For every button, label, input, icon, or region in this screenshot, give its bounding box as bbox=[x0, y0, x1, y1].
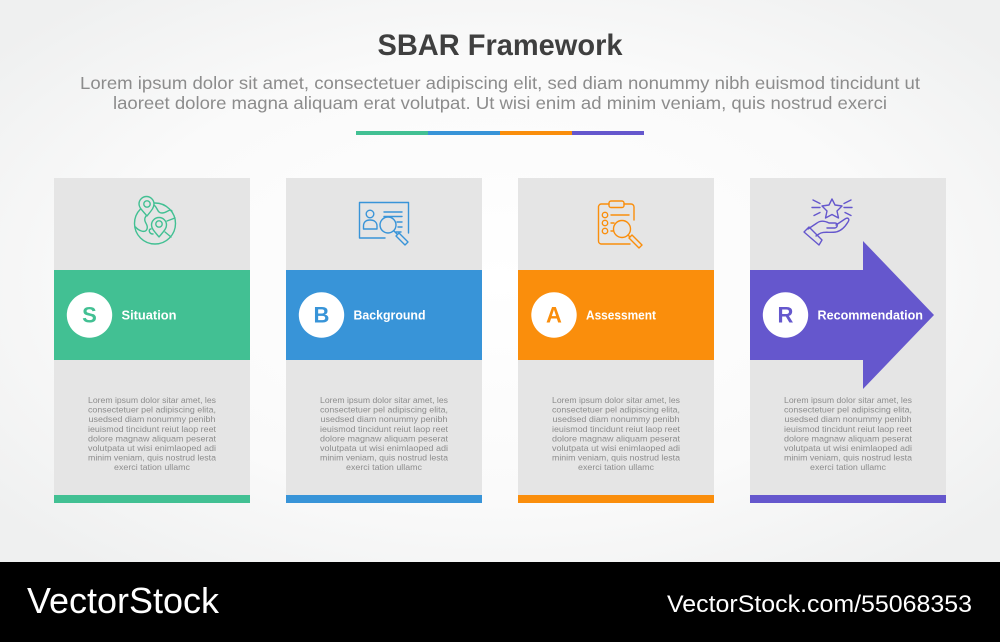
description text: volutpata ut wisi enimlaoped adi bbox=[88, 443, 216, 453]
description text: minim veniam, quis nostrud lesta bbox=[552, 453, 680, 463]
description text: ieuismod tincidunt reiut laop reet bbox=[784, 424, 913, 434]
label: situation: Situation bbox=[122, 308, 176, 322]
description text: exerci tation ullamc bbox=[810, 462, 887, 472]
description text: volutpata ut wisi enimlaoped adi bbox=[552, 443, 680, 453]
footer image id: VectorStock.com/55068353 bbox=[667, 591, 972, 618]
description text bbox=[320, 395, 449, 472]
label: assessment: Assessment bbox=[586, 308, 657, 322]
label: background: Background bbox=[354, 308, 426, 322]
description text: consectetuer pel adipiscing elita, bbox=[784, 405, 912, 415]
label: recommendation: Recommendation bbox=[818, 308, 923, 322]
description text: usedsed diam nonummy penibh bbox=[320, 414, 448, 424]
band: situation bbox=[54, 270, 250, 360]
description text: exerci tation ullamc bbox=[346, 462, 423, 472]
panel: assessment bbox=[518, 178, 714, 503]
description text: minim veniam, quis nostrud lesta bbox=[320, 453, 448, 463]
description text: usedsed diam nonummy penibh bbox=[784, 414, 912, 424]
band: background bbox=[286, 270, 482, 360]
letter badge B: B bbox=[314, 302, 329, 328]
icon: profile card with magnifier bbox=[360, 202, 408, 245]
arrow band: recommendation bbox=[750, 241, 934, 389]
description text: exerci tation ullamc bbox=[578, 462, 655, 472]
description text: consectetuer pel adipiscing elita, bbox=[88, 405, 216, 415]
subtitle text: Lorem ipsum dolor sit amet, consectetuer adipiscing elit, sed diam nonummy nibh euismod tincidunt ut bbox=[80, 73, 920, 93]
description text: usedsed diam nonummy penibh bbox=[552, 414, 680, 424]
bottom bar bbox=[286, 495, 482, 503]
panel: background bbox=[286, 178, 482, 503]
letter badge A: A bbox=[546, 302, 562, 328]
description text: ieuismod tincidunt reiut laop reet bbox=[320, 424, 449, 434]
subtitle text: laoreet dolore magna aliquam erat volutpat. Ut wisi enim ad minim veniam, quis nostrud exerci bbox=[113, 93, 887, 113]
description text: ieuismod tincidunt reiut laop reet bbox=[88, 424, 217, 434]
description text: volutpata ut wisi enimlaoped adi bbox=[784, 443, 912, 453]
description text: minim veniam, quis nostrud lesta bbox=[784, 453, 912, 463]
letter badge B bbox=[299, 292, 344, 338]
icon: clipboard with magnifier bbox=[598, 201, 642, 248]
subtitle text bbox=[80, 73, 920, 113]
letter badge S bbox=[67, 292, 112, 338]
description text bbox=[784, 395, 913, 472]
description text: dolore magnaw aliquam peserat bbox=[784, 433, 913, 443]
bottom bar bbox=[750, 495, 946, 503]
description text: ieuismod tincidunt reiut laop reet bbox=[552, 424, 681, 434]
description text: usedsed diam nonummy penibh bbox=[88, 414, 216, 424]
description text: dolore magnaw aliquam peserat bbox=[320, 433, 449, 443]
description text: exerci tation ullamc bbox=[114, 462, 191, 472]
description text: consectetuer pel adipiscing elita, bbox=[320, 405, 448, 415]
icon: globe with location pins bbox=[134, 196, 176, 244]
description text bbox=[552, 395, 681, 472]
footer bar bbox=[0, 562, 1000, 642]
icon: hand holding star bbox=[804, 199, 852, 245]
letter badge R: R bbox=[778, 302, 794, 328]
description text: Lorem ipsum dolor sitar amet, les bbox=[784, 395, 912, 405]
letter badge S: S bbox=[82, 302, 97, 328]
footer logo text: VectorStock bbox=[27, 580, 220, 621]
description text: Lorem ipsum dolor sitar amet, les bbox=[552, 395, 680, 405]
title divider: four colour bar bbox=[356, 131, 644, 135]
description text: dolore magnaw aliquam peserat bbox=[552, 433, 681, 443]
bottom bar bbox=[54, 495, 250, 503]
title: SBAR Framework bbox=[378, 29, 623, 62]
panel: situation bbox=[54, 178, 250, 503]
description text: volutpata ut wisi enimlaoped adi bbox=[320, 443, 448, 453]
letter badge R bbox=[763, 292, 808, 338]
description text: dolore magnaw aliquam peserat bbox=[88, 433, 217, 443]
description text bbox=[88, 395, 217, 472]
description text: Lorem ipsum dolor sitar amet, les bbox=[88, 395, 216, 405]
description text: minim veniam, quis nostrud lesta bbox=[88, 453, 216, 463]
bottom bar bbox=[518, 495, 714, 503]
description text: consectetuer pel adipiscing elita, bbox=[552, 405, 680, 415]
panel: recommendation bbox=[750, 178, 946, 503]
letter badge A bbox=[531, 292, 577, 338]
description text: Lorem ipsum dolor sitar amet, les bbox=[320, 395, 448, 405]
band: assessment bbox=[518, 270, 714, 360]
